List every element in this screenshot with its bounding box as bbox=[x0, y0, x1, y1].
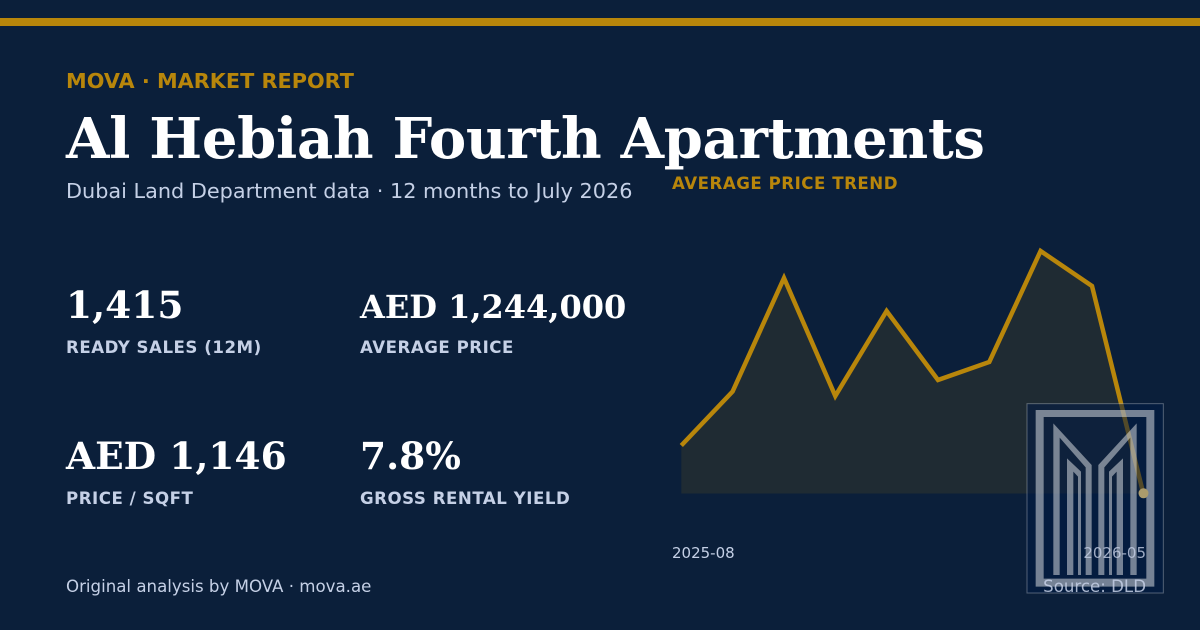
axis label end: 2026-05 bbox=[1083, 544, 1146, 562]
title: Al Hebiah Fourth Apartments bbox=[65, 106, 985, 172]
stat: average price: AED 1,244,000 bbox=[359, 288, 626, 326]
chart end marker bbox=[1138, 488, 1148, 498]
stat: ready sales: READY SALES (12M) bbox=[66, 338, 262, 357]
stat: rental yield: GROSS RENTAL YIELD bbox=[360, 489, 570, 508]
chart line bbox=[681, 251, 1143, 494]
stat: price per sqft bbox=[65, 434, 287, 508]
stat: rental yield bbox=[360, 434, 570, 508]
footer credit: Original analysis by MOVA · mova.ae bbox=[66, 577, 371, 596]
stat: ready sales bbox=[66, 283, 262, 357]
stat: price per sqft: AED 1,146 bbox=[65, 434, 287, 478]
chart: price trend bbox=[681, 251, 1143, 494]
stat: rental yield: 7.8% bbox=[360, 434, 461, 478]
eyebrow: MOVA · MARKET REPORT bbox=[66, 69, 355, 93]
logo watermark bbox=[1027, 404, 1163, 593]
source note: Source: DLD bbox=[1043, 577, 1146, 596]
stat: price per sqft: PRICE / SQFT bbox=[66, 489, 194, 508]
stat: ready sales: 1,415 bbox=[66, 283, 183, 327]
stat: average price bbox=[359, 288, 626, 357]
stat: average price: AVERAGE PRICE bbox=[360, 338, 514, 357]
subtitle: Dubai Land Department data · 12 months to July 2026 bbox=[66, 179, 632, 203]
axis label start: 2025-08 bbox=[672, 544, 735, 562]
top accent bar bbox=[0, 18, 1200, 26]
chart heading: AVERAGE PRICE TREND bbox=[672, 174, 898, 193]
chart area fill bbox=[681, 251, 1143, 494]
